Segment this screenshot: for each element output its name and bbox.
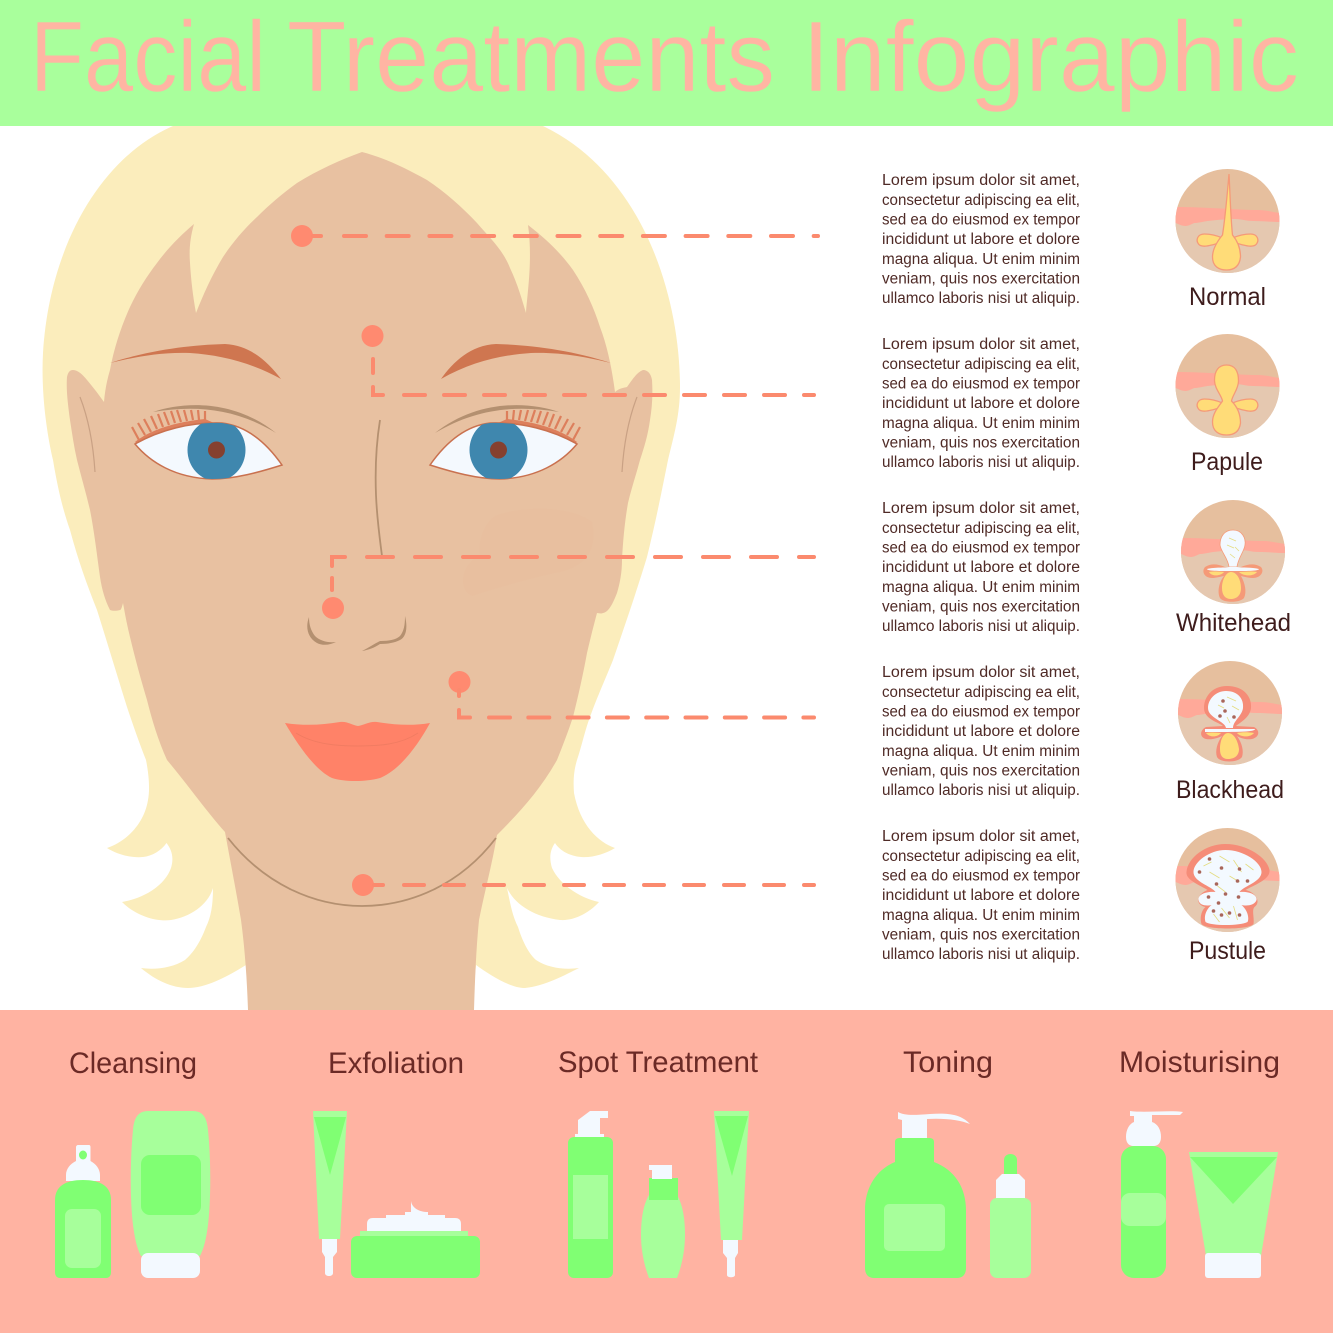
text block 1: ullamco laboris nisi ut aliquip. (882, 290, 1080, 307)
product: toner dropper (990, 1154, 1031, 1278)
connector: nose (322, 557, 814, 619)
connector: between brows (362, 325, 814, 395)
text block 2: veniam, quis nos exercitation (882, 434, 1080, 452)
text block 1: sed ea do eiusmod ex tempor (882, 212, 1080, 228)
text block 5: incididunt ut labore et dolore (882, 887, 1080, 904)
text block 1: veniam, quis nos exercitation (882, 270, 1080, 288)
text block 5: ullamco laboris nisi ut aliquip. (882, 946, 1080, 963)
text block 5: sed ea do eiusmod ex tempor (882, 868, 1080, 884)
text block 1: incididunt ut labore et dolore (882, 231, 1080, 248)
text block 4: Lorem ipsum dolor sit amet, (882, 664, 1080, 681)
illustration: woman's face (43, 126, 680, 1010)
bottom panel (0, 1010, 1333, 1333)
text block 1 (882, 172, 1080, 307)
text block 4: incididunt ut labore et dolore (882, 723, 1080, 740)
connector: cheek (448, 671, 814, 718)
text block 5: consectetur adipiscing ea elit, (882, 848, 1080, 865)
product: pump bottle (568, 1111, 613, 1278)
text block 5 (882, 828, 1080, 963)
ears inner lines (80, 397, 637, 472)
text block 2: ullamco laboris nisi ut aliquip. (882, 454, 1080, 471)
product: cream jar (351, 1201, 480, 1278)
right eyebrow (441, 344, 611, 379)
product: shampoo bottle (131, 1111, 210, 1278)
left eye (132, 405, 282, 481)
left eyebrow (110, 344, 281, 379)
text block 3: veniam, quis nos exercitation (882, 598, 1080, 616)
icon: papule (1176, 334, 1280, 441)
product: moisturiser tube (1189, 1152, 1278, 1278)
cheek blush (463, 509, 593, 596)
icon: normal skin (1176, 169, 1280, 276)
face and neck skin (67, 152, 652, 1010)
product: spray bottle (55, 1145, 111, 1278)
product: moisturiser pump bottle (1121, 1111, 1183, 1278)
text block 2: incididunt ut labore et dolore (882, 395, 1080, 412)
text block 3: Lorem ipsum dolor sit amet, (882, 500, 1080, 517)
nose (307, 420, 406, 651)
text block 2: magna aliqua. Ut enim minim (882, 415, 1080, 432)
connector: forehead (291, 225, 818, 247)
chin line (228, 838, 496, 906)
text block 4: consectetur adipiscing ea elit, (882, 684, 1080, 701)
product: exfoliation tube (313, 1111, 347, 1276)
hair (43, 126, 680, 988)
header band (0, 0, 1333, 126)
text block 1: consectetur adipiscing ea elit, (882, 192, 1080, 209)
icon: whitehead (1181, 500, 1285, 607)
text block 3: incididunt ut labore et dolore (882, 559, 1080, 576)
text block 1: magna aliqua. Ut enim minim (882, 251, 1080, 268)
heading: Spot Treatment: Spot Treatment (558, 1046, 759, 1079)
text block 4 (882, 664, 1080, 799)
product: small serum bottle (641, 1165, 685, 1278)
title (30, 1, 1299, 113)
text block 5: veniam, quis nos exercitation (882, 926, 1080, 944)
label: Papule: Papule (1191, 448, 1263, 476)
text block 2: consectetur adipiscing ea elit, (882, 356, 1080, 373)
product: toning pump bottle (865, 1112, 970, 1278)
label: Blackhead: Blackhead (1176, 776, 1284, 804)
text block 2 (882, 336, 1080, 471)
label: Pustule: Pustule (1189, 937, 1266, 965)
text block 3: magna aliqua. Ut enim minim (882, 579, 1080, 596)
text block 4: magna aliqua. Ut enim minim (882, 743, 1080, 760)
heading: Toning: Toning (903, 1046, 993, 1079)
text block 4: sed ea do eiusmod ex tempor (882, 704, 1080, 720)
text block 2: sed ea do eiusmod ex tempor (882, 376, 1080, 392)
connector: chin (352, 874, 814, 896)
title: Facial (30, 1, 266, 113)
icon: pustule (1176, 828, 1280, 935)
text block 4: ullamco laboris nisi ut aliquip. (882, 782, 1080, 799)
lips (285, 722, 430, 781)
product: spot treatment tube (714, 1111, 749, 1277)
title: Infographic (802, 1, 1299, 113)
text block 5: Lorem ipsum dolor sit amet, (882, 828, 1080, 845)
text block 4: veniam, quis nos exercitation (882, 762, 1080, 780)
heading: Cleansing: Cleansing (69, 1047, 197, 1080)
right eye (430, 405, 580, 481)
heading: Exfoliation: Exfoliation (328, 1047, 464, 1080)
text block 3: sed ea do eiusmod ex tempor (882, 540, 1080, 556)
text block 5: magna aliqua. Ut enim minim (882, 907, 1080, 924)
text block 3: consectetur adipiscing ea elit, (882, 520, 1080, 537)
title: Treatments (287, 1, 775, 113)
label: Whitehead: Whitehead (1176, 609, 1291, 637)
icon: blackhead (1178, 661, 1282, 768)
text block 3: ullamco laboris nisi ut aliquip. (882, 618, 1080, 635)
text block 1: Lorem ipsum dolor sit amet, (882, 172, 1080, 189)
label: Normal: Normal (1189, 283, 1266, 311)
heading: Moisturising: Moisturising (1119, 1046, 1280, 1079)
text block 2: Lorem ipsum dolor sit amet, (882, 336, 1080, 353)
text block 3 (882, 500, 1080, 635)
